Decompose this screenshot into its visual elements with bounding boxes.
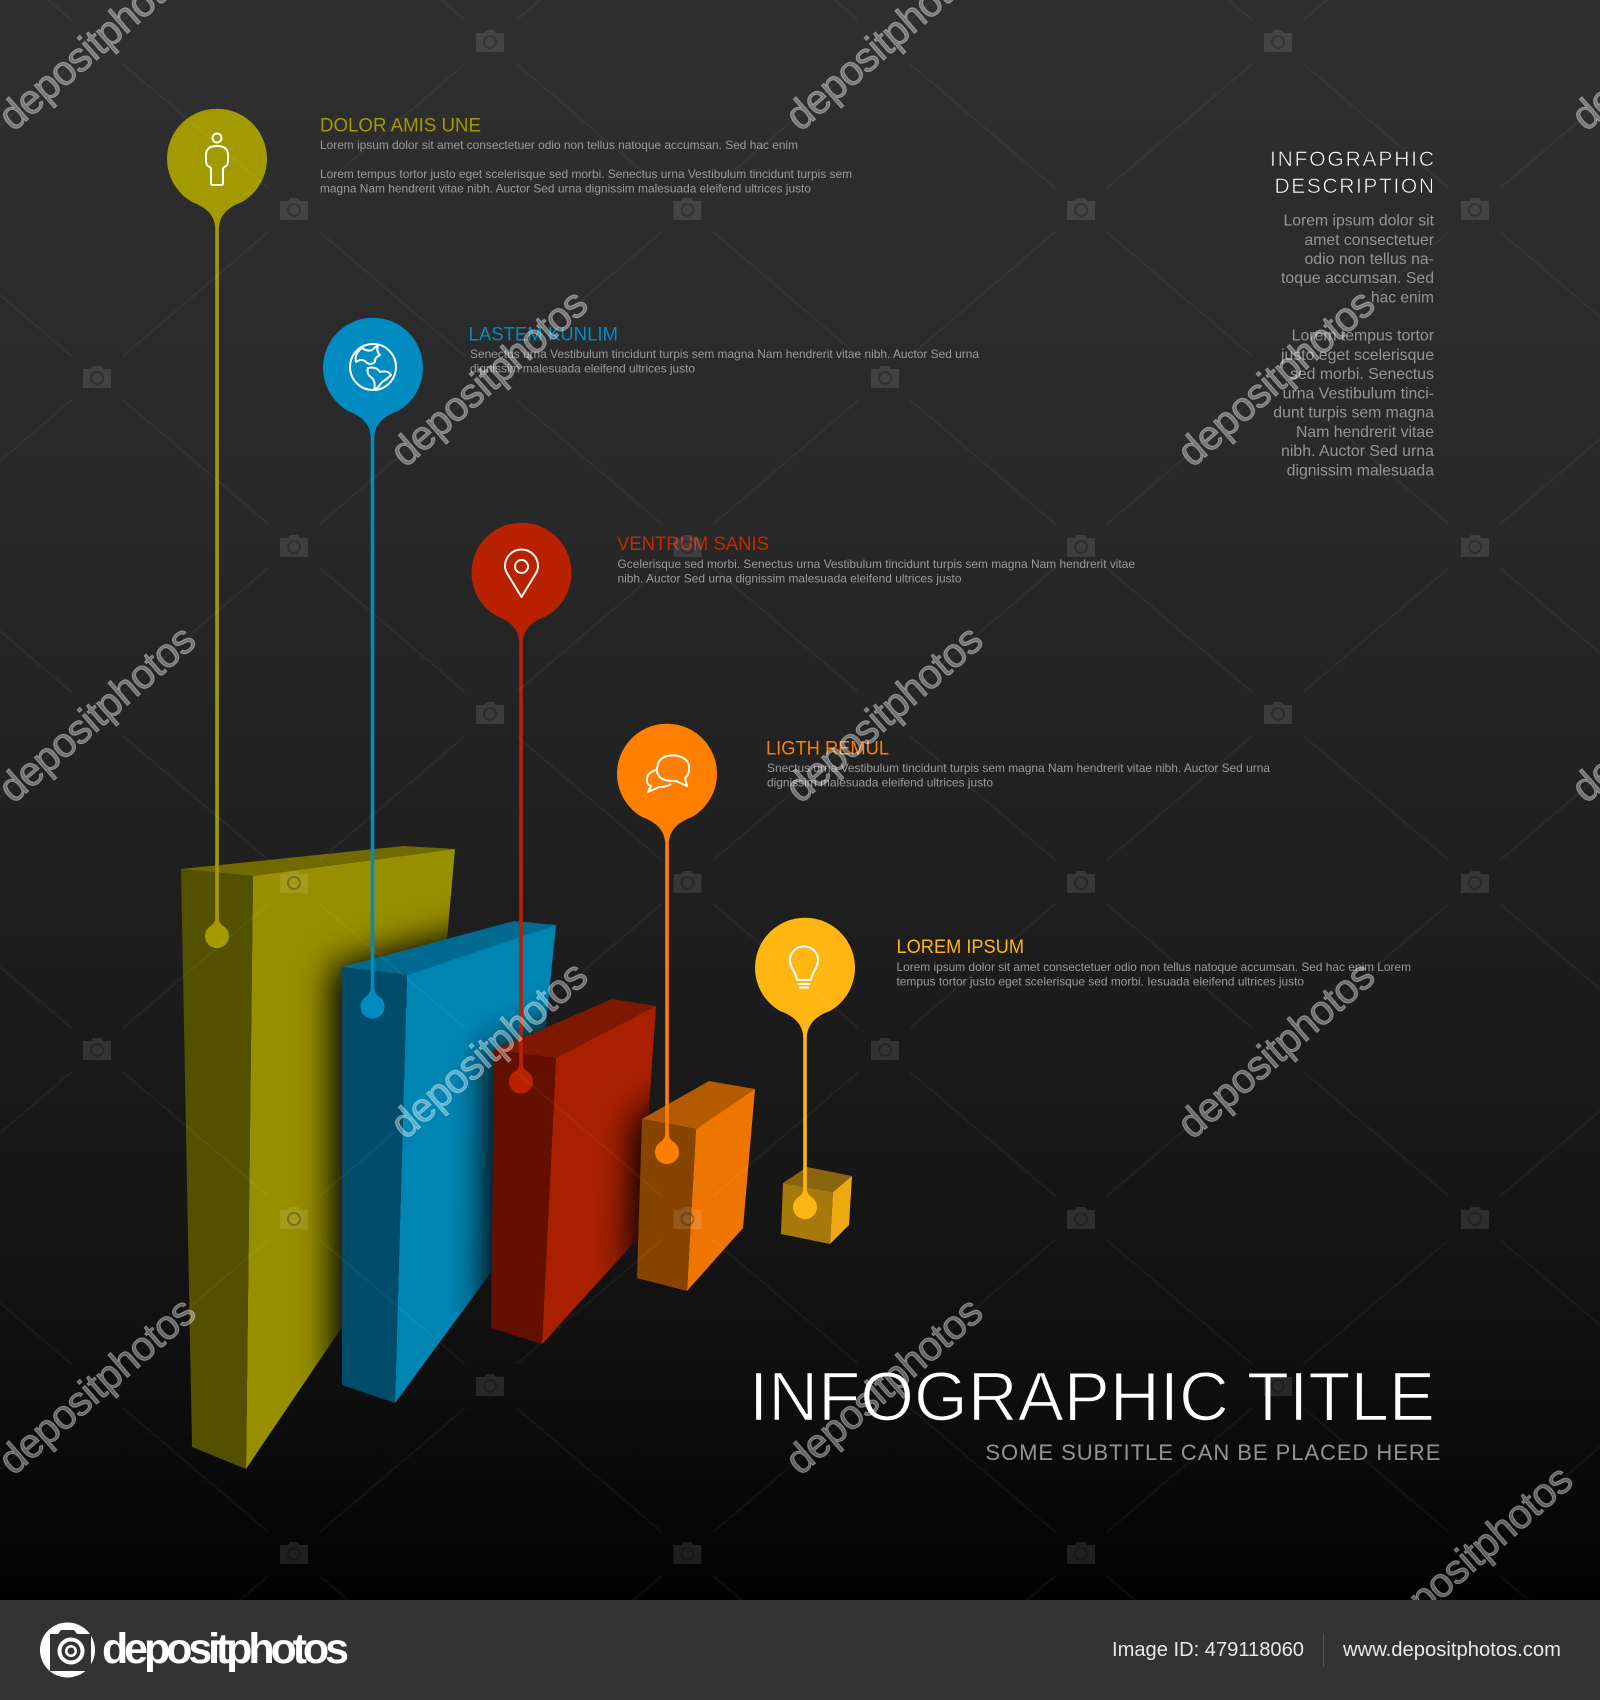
description heading: INFOGRAPHIC — [1270, 148, 1434, 171]
item 3: text block: Gcelerisque sed morbi. Senectus urna Vestibulum tincidunt turpis sem magna Nam hendrerit vitae — [618, 557, 1135, 571]
footer logo icon — [40, 1622, 95, 1678]
description heading — [1270, 148, 1434, 198]
icon: light bulb — [790, 947, 818, 988]
item 3: text block: nibh. Auctor Sed urna dignissim malesuada eleifend ultrices justo — [618, 572, 962, 586]
description body — [1273, 212, 1435, 479]
item 1: text block: Lorem tempus tortor justo eget scelerisque sed morbi. Senectus urna Vestibulum tincidunt turpis sem — [320, 167, 852, 181]
description heading: DESCRIPTION — [1274, 175, 1434, 198]
heading: lastem kunlim: LASTEM KUNLIM — [468, 324, 618, 346]
title: INFOGRAPHIC TITLE — [749, 1358, 1435, 1436]
watermark text: depositphotos — [776, 1288, 991, 1483]
item 2: text block: Senectus urna Vestibulum tincidunt turpis sem magna Nam hendrerit vitae nibh. Auctor Sed urna — [470, 347, 979, 361]
icon: globe — [350, 344, 396, 390]
description body: Lorem ipsum dolor sit — [1284, 212, 1435, 230]
description body: justo eget scelerisque — [1280, 347, 1434, 364]
infographic description panel — [1270, 148, 1435, 479]
description body: toque accumsan. Sed — [1281, 270, 1434, 287]
description body: dignissim malesuada — [1287, 462, 1434, 479]
bar chart: 3D bars — [181, 846, 852, 1469]
bar 4: orange — [637, 1081, 755, 1291]
item 2: text block: dignissim malesuada eleifend ultrices justo — [470, 362, 695, 376]
pin 3: red with map marker icon — [471, 523, 572, 1094]
footer bar — [0, 1600, 1600, 1700]
item 1: text block: Lorem ipsum dolor sit amet consectetuer odio non tellus natoque accumsan. Sed hac enim — [320, 138, 798, 152]
icon: person — [206, 134, 228, 185]
heading: lorem ipsum: LOREM IPSUM — [896, 937, 1024, 958]
item 5: text block — [896, 937, 1411, 988]
bar 3: red — [491, 999, 656, 1344]
watermark text: depositphotos — [1168, 280, 1383, 475]
item 1: text block — [320, 116, 852, 196]
bar 1: olive — [181, 846, 455, 1469]
description body: odio non tellus na- — [1304, 251, 1434, 268]
item 4: text block — [766, 738, 1270, 790]
pin 2: blue with globe icon — [323, 318, 423, 1019]
pin 4: orange with chat icon — [617, 724, 717, 1164]
website url: www.depositphotos.com — [1342, 1639, 1561, 1661]
description body: Nam hendrerit vitae — [1296, 424, 1434, 441]
watermark text: depositphotos — [381, 280, 596, 475]
bar 2: blue — [342, 921, 556, 1403]
watermark text: depositphotos — [1366, 1456, 1581, 1651]
description body: urna Vestibulum tinci- — [1283, 385, 1434, 402]
watermark text: depositphotos — [1168, 952, 1383, 1147]
watermark camera icons — [83, 30, 1489, 1564]
description body: nibh. Auctor Sed urna — [1281, 443, 1434, 460]
item 4: text block: Snectus urna Vestibulum tincidunt turpis sem magna Nam hendrerit vitae nibh. Auctor Sed urna — [767, 761, 1270, 775]
description body: dunt turpis sem magna — [1273, 404, 1434, 422]
item 1: text block: magna Nam hendrerit vitae nibh. Auctor Sed urna dignissim malesuada eleifend ultrices justo — [320, 182, 811, 196]
heading: ventrum sanis: VENTRUM SANIS — [617, 534, 769, 555]
subtitle: SOME SUBTITLE CAN BE PLACED HERE — [985, 1440, 1440, 1465]
icon: chat bubbles — [647, 755, 689, 792]
item 5: text block: Lorem ipsum dolor sit amet consectetuer odio non tellus natoque accumsan. Sed hac enim Lorem — [896, 960, 1411, 974]
watermark text: depositphotos — [381, 952, 596, 1147]
watermark text: depositphotos — [776, 616, 991, 811]
description body: Lorem tempus tortor — [1292, 328, 1434, 344]
bar 5: yellow — [781, 1167, 852, 1244]
description body: hac enim — [1371, 290, 1434, 306]
item 3: text block — [617, 534, 1135, 586]
pin 5: yellow with light bulb icon — [755, 918, 855, 1219]
heading: dolor amis une: DOLOR AMIS UNE — [320, 116, 481, 136]
item 5: text block: tempus tortor justo eget scelerisque sed morbi. Iesuada eleifend ultrices justo — [896, 974, 1304, 988]
item 4: text block: dignissim malesuada eleifend ultrices justo — [767, 776, 993, 790]
description body: sed morbi. Senectus — [1290, 366, 1434, 383]
description body: amet consectetuer — [1304, 232, 1434, 249]
image id: Image ID: 479118060 — [1112, 1639, 1304, 1661]
heading: ligth remul: LIGTH REMUL — [766, 738, 889, 760]
icon: map marker — [505, 550, 538, 597]
pin 1: olive with person icon — [167, 109, 267, 948]
item 2: text block — [468, 324, 979, 376]
footer logo wordmark: depositphotos — [102, 1625, 349, 1673]
